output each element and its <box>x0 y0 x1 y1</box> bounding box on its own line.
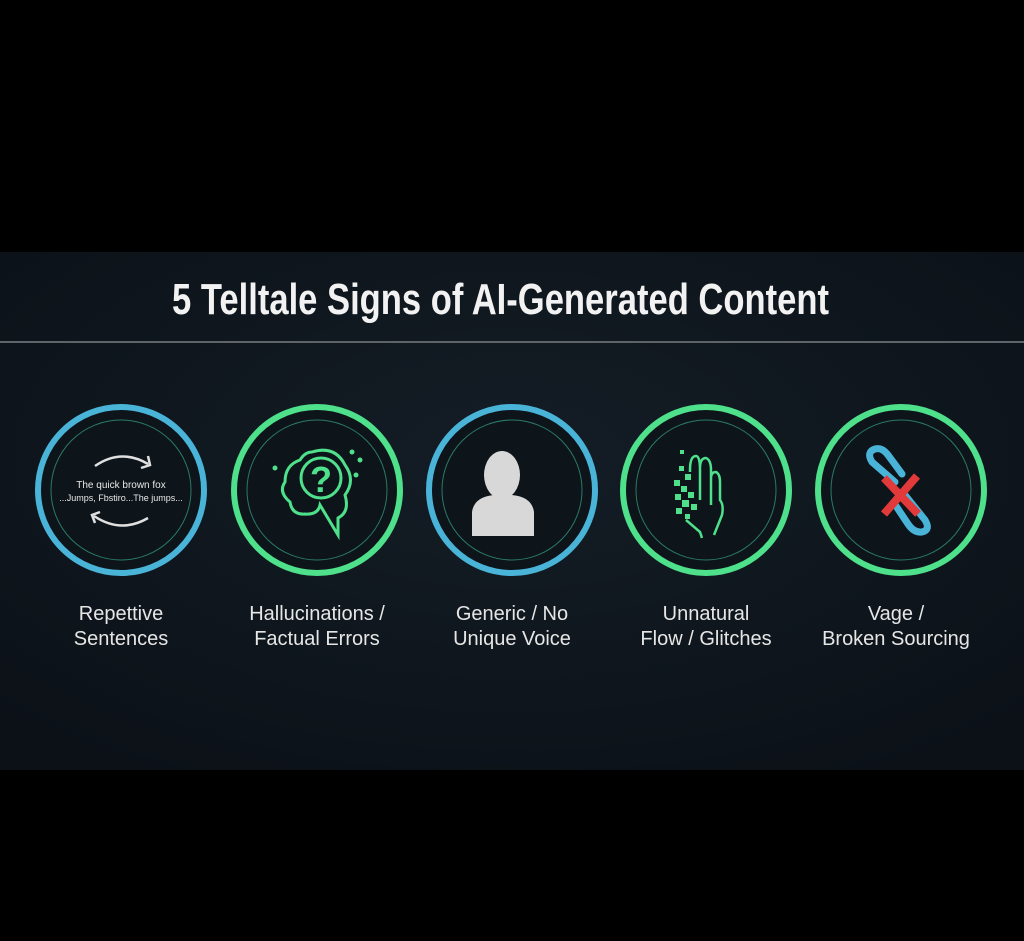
labels: Flow / Glitches <box>640 628 772 650</box>
labels: Sentences <box>74 628 168 650</box>
labels: Hallucinations / <box>249 603 385 625</box>
sign 2: hallucinations <box>234 407 400 573</box>
title: 5 Telltale Signs of AI-Generated Content <box>172 275 829 324</box>
icon: broken chain with X <box>870 449 927 532</box>
labels: Generic / No <box>456 603 568 625</box>
labels: Broken Sourcing <box>822 628 970 650</box>
labels: Factual Errors <box>254 628 380 650</box>
sign 4: unnatural flow <box>623 407 789 573</box>
labels: Repettive <box>79 603 163 625</box>
icon: head with question <box>282 450 350 535</box>
labels: Vage / <box>868 603 925 625</box>
sign 2: hallucinations: ? <box>310 459 332 500</box>
sign 3: generic voice <box>429 407 595 573</box>
labels: Unnatural <box>663 603 749 625</box>
labels: Unique Voice <box>453 628 571 650</box>
sign 5: broken sourcing <box>818 407 984 573</box>
icon: glitch hand <box>686 456 723 538</box>
panel: background <box>0 252 1024 770</box>
sign 1: repetitive sentences: The quick brown fox <box>76 480 166 491</box>
labels <box>74 603 970 650</box>
sign 1: repetitive sentences: ...Jumps, Fbstiro...The jumps... <box>59 493 183 503</box>
icon: cycle arrows with text <box>92 456 150 526</box>
icon: person <box>472 451 534 536</box>
sign 1: repetitive sentences <box>38 407 204 573</box>
